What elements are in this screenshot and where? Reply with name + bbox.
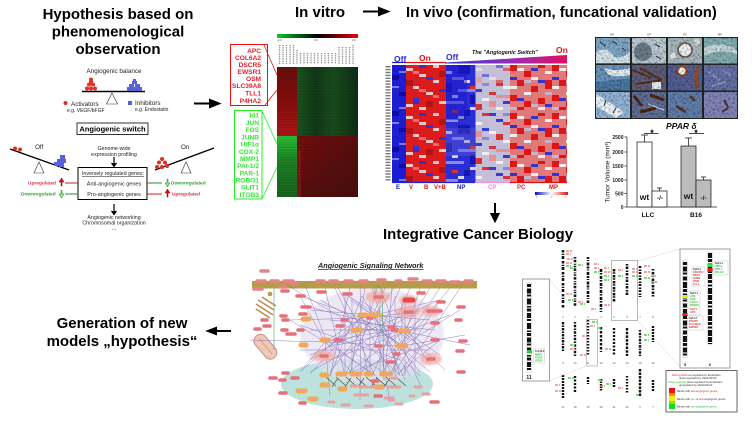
- chromosome numbers: 22: [625, 405, 629, 409]
- left regulation labels: Upregulated: [28, 180, 56, 186]
- chromosome numbers: 7: [639, 315, 641, 319]
- column labels: PC: [683, 32, 687, 36]
- legend: chromosome map: upregulated by VEGF/bFGF: [679, 383, 713, 387]
- chromosomes row 3: [563, 369, 653, 398]
- off/on headers: [394, 45, 568, 64]
- legend: chromosome map: Green symbols down-regulated by Endostatin,: [668, 380, 723, 384]
- group labels: NP: [457, 185, 465, 191]
- switch heading: The "Angiogenic Switch": [472, 50, 538, 56]
- chart title: PPAR δ: [666, 121, 697, 131]
- gene box: green: Id1: [249, 112, 259, 120]
- inset: chromosomes 5 and 6: EWSR1: [689, 325, 699, 329]
- bar labels: [639, 191, 707, 219]
- group labels: B: [424, 185, 429, 191]
- inset: chromosomes 5 and 6: DKK1: [693, 273, 701, 277]
- large glow nodes: [313, 291, 442, 365]
- column labels: 0.0: [314, 38, 318, 42]
- chromosome numbers: 10: [573, 361, 577, 365]
- arrow: genes to networking: [112, 204, 116, 214]
- micrograph: PC: [668, 38, 702, 118]
- color scale bar: [277, 34, 358, 38]
- box: inversely regulated genes: Inversely regulated genes:: [82, 171, 144, 177]
- inset: chromosomes 5 and 6: 5q11.2: [689, 316, 697, 320]
- legend: chromosome map: Bands with anti-angiogenic genes: [677, 389, 718, 393]
- inset: chromosomes 5 and 6: COX-2: [690, 300, 698, 304]
- zoom frame: chromosomes 5-7 region: [612, 260, 638, 320]
- title: hypothesis: observation: [75, 41, 161, 58]
- y axis: 0: [621, 205, 624, 211]
- left regulation labels: [21, 178, 78, 198]
- chromosome numbers: 6: [626, 315, 628, 319]
- gene box: green: [234, 110, 277, 199]
- color legend: 0: [551, 196, 553, 198]
- bar labels: wt: [683, 191, 693, 201]
- chromosomes row 2: [563, 320, 653, 356]
- chromosome numbers: 8: [652, 315, 654, 319]
- gene box: red: DSCR5: [239, 62, 261, 69]
- chromosome numbers: 9: [562, 361, 564, 365]
- title: generation of new models: models „hypothesis“: [47, 333, 197, 350]
- heading: angiogenic switch: Angiogenic switch: [79, 124, 146, 134]
- gene box: green: HIF1α: [241, 142, 259, 148]
- title: in vitro: In vitro: [295, 4, 345, 21]
- heatmap quadrants: [277, 67, 358, 197]
- bar labels: -/-: [657, 195, 663, 202]
- chromosome numbers: 15: [638, 361, 642, 365]
- green and blue highlights: [274, 288, 384, 380]
- chromosome numbers: Y: [652, 405, 654, 409]
- y axis: 1500: [612, 164, 624, 170]
- inset: chromosomes 5 and 6: 5q31.1: [693, 267, 702, 271]
- chromosome numbers: 5: [613, 315, 615, 319]
- bar labels: wt: [639, 192, 649, 202]
- title: integrative cancer biology: Integrative Cancer Biology: [383, 226, 574, 243]
- group labels: V+B: [434, 185, 447, 191]
- text: genome-wide profiling: expression profiling: [91, 152, 137, 158]
- inset: chromosomes 5 and 6: CDC25C: [693, 270, 704, 274]
- gene box: green: SLIT1: [241, 184, 259, 192]
- text: networking: Chromosomal organization: [82, 220, 146, 226]
- arrow: network to new models: [208, 328, 231, 334]
- gene box: green: COX-2: [239, 149, 259, 156]
- dense gene cluster lines: [326, 377, 406, 387]
- y axis: Tumor Volume (mm³): [604, 141, 612, 203]
- significance markers: *: [650, 128, 654, 138]
- cytoplasm haze: [300, 287, 444, 383]
- group labels: V: [409, 185, 413, 191]
- inset: chromosomes 5 and 6: DSCR5: [689, 319, 698, 323]
- gene box: red: OSM: [246, 76, 261, 83]
- arrow: in vivo to integrative biology: [492, 203, 498, 221]
- chromosome numbers: 16: [651, 361, 655, 365]
- heading: angiogenic balance: Angiogenic balance: [87, 68, 142, 75]
- chromosome numbers: 17: [561, 405, 565, 409]
- panel: angiogenic switch heatmap: [388, 45, 568, 198]
- title: hypothesis: Hypothesis based on: [43, 6, 193, 23]
- group labels: MP: [549, 185, 558, 191]
- gene box: green: JUNB: [241, 134, 259, 142]
- chromosome numbers: 14: [625, 361, 629, 365]
- legend: chromosome map: down-regulated by VEGF/bFGF: [679, 376, 717, 380]
- chromosome numbers: 19: [586, 405, 590, 409]
- gene box: green: PAR-1: [240, 170, 259, 178]
- gene box: red: APC: [247, 48, 261, 55]
- panel: chromosome map: [522, 249, 737, 412]
- highlighted orange nodes: [298, 315, 408, 399]
- off/on headers: On: [419, 53, 431, 63]
- network edges: [250, 285, 470, 402]
- significance markers: *: [694, 128, 698, 138]
- inset: chromosomes 5 and 6: TLL1: [693, 282, 700, 286]
- inset: chromosomes 5 and 6: SLC39A8: [689, 322, 701, 326]
- y axis: 2000: [612, 150, 624, 156]
- bar labels: LLC: [642, 212, 655, 219]
- inset: chromosomes 5 and 6: 5q21.1: [690, 291, 699, 295]
- group labels: CP: [488, 185, 496, 191]
- text: networking: Angiogenic networking: [87, 215, 141, 221]
- box: inversely regulated genes: Anti-angiogenic genes: [87, 182, 141, 188]
- color legend: [535, 192, 568, 198]
- gene box: red: [230, 44, 277, 106]
- color legend: -3: [535, 196, 538, 198]
- panel: angiogenic signaling network: [250, 261, 477, 409]
- inset: chromosomes 5 and 6: PAR-1: [715, 267, 723, 271]
- chromosome numbers: 20: [599, 405, 603, 409]
- group labels: [396, 185, 558, 191]
- y axis: [604, 135, 717, 211]
- y axis: 500: [615, 192, 624, 198]
- icon: off balance: Off: [35, 144, 44, 151]
- arrow: in vitro to in vivo: [363, 8, 388, 15]
- bar labels: B16: [690, 212, 702, 219]
- column labels: [277, 38, 356, 64]
- chromosome numbers: 21: [612, 405, 616, 409]
- gene box: red: SLC39A8: [232, 83, 261, 90]
- chromosome numbers: 1: [562, 315, 564, 319]
- icon: off balance: [10, 144, 69, 173]
- legend: activators: [64, 101, 105, 114]
- bottom group bars: [392, 182, 475, 184]
- mitochondrion: [251, 332, 279, 362]
- box: inversely regulated genes: [78, 168, 147, 200]
- title: in vivo: In vivo (confirmation, funcational validation): [406, 5, 717, 21]
- column labels: NP: [610, 32, 614, 36]
- color legend: 3: [565, 196, 567, 198]
- off/on headers: Off: [394, 54, 406, 64]
- legend: activators: Activators: [71, 101, 99, 108]
- inset: chromosome 11: PGDS: [535, 356, 543, 360]
- micrograph: CP: [632, 38, 666, 118]
- gene box: red: TLL1: [245, 90, 261, 98]
- off/on headers: Off: [446, 52, 458, 62]
- inset: chromosomes 5 and 6: 5: [684, 362, 687, 367]
- chromosome numbers: 11: [587, 361, 590, 365]
- legend: inhibitors: Inhibitors: [135, 100, 161, 107]
- inset: chromosomes 5 and 6: 6p21.1: [715, 261, 724, 265]
- legend: chromosome map: Bands with pro-angiogenic genes: [677, 404, 717, 408]
- inset: chromosome 11: 11: [526, 375, 532, 381]
- y axis: 1000: [612, 178, 624, 184]
- legend: chromosome map: Red symbols up-regulated by Endostatin,: [672, 373, 721, 377]
- significance markers: [644, 128, 704, 138]
- left regulation labels: Downregulated: [21, 192, 56, 198]
- chromosome numbers: 12: [599, 361, 603, 365]
- group labels: E: [396, 185, 400, 191]
- inset: chromosomes 5 and 6: HIF1α: [715, 264, 723, 268]
- box: inversely regulated genes: Pro-angiogenic genes: [87, 192, 141, 198]
- right regulation labels: Upregulated: [172, 192, 200, 198]
- column labels: 2.0: [352, 38, 356, 42]
- cell membrane: [252, 281, 477, 288]
- chromosome numbers: 4: [600, 315, 602, 319]
- inset: chromosome 11: 11q13.2: [535, 349, 545, 353]
- column labels: CP: [647, 32, 651, 36]
- right regulation labels: Downregulated: [171, 180, 206, 186]
- icon: on balance: [155, 144, 214, 173]
- inset: chromosome 11: MMP1: [535, 352, 543, 356]
- bright node: [405, 298, 413, 302]
- bars: [637, 135, 711, 207]
- legend: chromosome map: [666, 370, 737, 412]
- chromosome numbers: 2: [574, 315, 576, 319]
- zoom connector lines: [549, 249, 680, 381]
- gene box: green: FOS: [245, 127, 260, 134]
- inset: chromosomes 5 and 6: PAI-1/2: [715, 270, 724, 274]
- inset: chromosomes 5 and 6: [680, 249, 730, 368]
- inset: chromosomes 5 and 6: APC: [690, 310, 696, 314]
- arrow: profiling to genes: [112, 157, 116, 166]
- nuclear lower nodes: [329, 378, 429, 406]
- chromosome numbers: X: [639, 405, 641, 409]
- header lines: [392, 62, 406, 64]
- icon: balance scale: [82, 79, 145, 104]
- legend: activators: e.g. VEGF/bFGF: [67, 108, 105, 114]
- gene box: red: COL6A2: [235, 55, 261, 62]
- inset: chromosomes 5 and 6: 6: [709, 362, 712, 367]
- arrow: hypothesis to in vitro: [194, 100, 219, 107]
- column labels: -2.0: [277, 38, 282, 42]
- gene box: green: ITGB3: [240, 192, 259, 199]
- gene box: red: P4HA2: [240, 98, 261, 105]
- column labels: MP: [718, 32, 722, 36]
- nucleus: [281, 359, 433, 409]
- chromosome numbers: 18: [573, 405, 577, 409]
- golgi: [256, 292, 276, 318]
- chromosome numbers: 13: [612, 361, 616, 365]
- micrograph: MP: [704, 38, 737, 118]
- legend: chromosome map: Bands with pro- & anti-angiogenic genes: [677, 397, 726, 401]
- group labels: PC: [517, 185, 526, 191]
- panel: angiogenic balance diagram: [10, 68, 214, 232]
- network title: Angiogenic Signaling Network: [317, 261, 424, 270]
- panel: gene expression heatmap: [230, 34, 358, 199]
- title: hypothesis: phenomenological: [52, 24, 184, 40]
- chromosome numbers: [561, 315, 655, 409]
- right regulation labels: [147, 179, 206, 198]
- bar labels: -/-: [700, 195, 707, 202]
- gene box: green: JUN: [246, 120, 259, 127]
- y axis: 2500: [612, 135, 624, 141]
- column labels: [610, 32, 722, 36]
- gene box: green: MMP1: [240, 156, 259, 163]
- panel: tumor volume bar chart: [604, 121, 717, 219]
- chromosomes row 1: [563, 250, 653, 312]
- inset: chromosome 11: ITGB3: [535, 358, 543, 362]
- heatmap cells: [392, 65, 567, 182]
- inset: chromosomes 5 and 6: FOS: [690, 297, 696, 301]
- chromosome numbers: 3: [587, 315, 589, 319]
- membrane nodes: [254, 271, 472, 289]
- inset: chromosomes 5 and 6: SLIT1: [690, 307, 698, 311]
- icon: on balance: On: [181, 144, 190, 151]
- gene box: green: PAI-1/2: [237, 163, 259, 170]
- legend: inhibitors: e.g. Endostatin: [135, 107, 169, 113]
- inset: chromosomes 5 and 6: OSM: [693, 279, 699, 283]
- legend: inhibitors: [128, 100, 169, 113]
- title: generation of new models: Generation of new: [57, 315, 187, 332]
- gene annotation tags: [555, 251, 656, 391]
- inset: chromosome 11: [522, 279, 550, 381]
- switch wedge: [445, 55, 567, 64]
- panel: histology micrographs: [595, 32, 738, 119]
- off/on headers: On: [556, 45, 568, 55]
- text: genome-wide profiling: Genome-wide: [98, 146, 130, 152]
- inset: chromosomes 5 and 6: JUNB: [693, 276, 700, 280]
- inset: chromosomes 5 and 6: JUN: [690, 294, 695, 298]
- gene box: green: ROBO1: [236, 178, 259, 184]
- inset: chromosomes 5 and 6: ROBO1: [690, 303, 700, 307]
- zoom frame: chromosome 11 region: [586, 320, 598, 366]
- gene box: red: EWSR1: [238, 69, 261, 76]
- micrograph: NP: [596, 38, 630, 118]
- row labels: [386, 66, 390, 181]
- text: networking: ...: [112, 226, 116, 232]
- cytoplasm and nuclear nodes: [255, 291, 466, 403]
